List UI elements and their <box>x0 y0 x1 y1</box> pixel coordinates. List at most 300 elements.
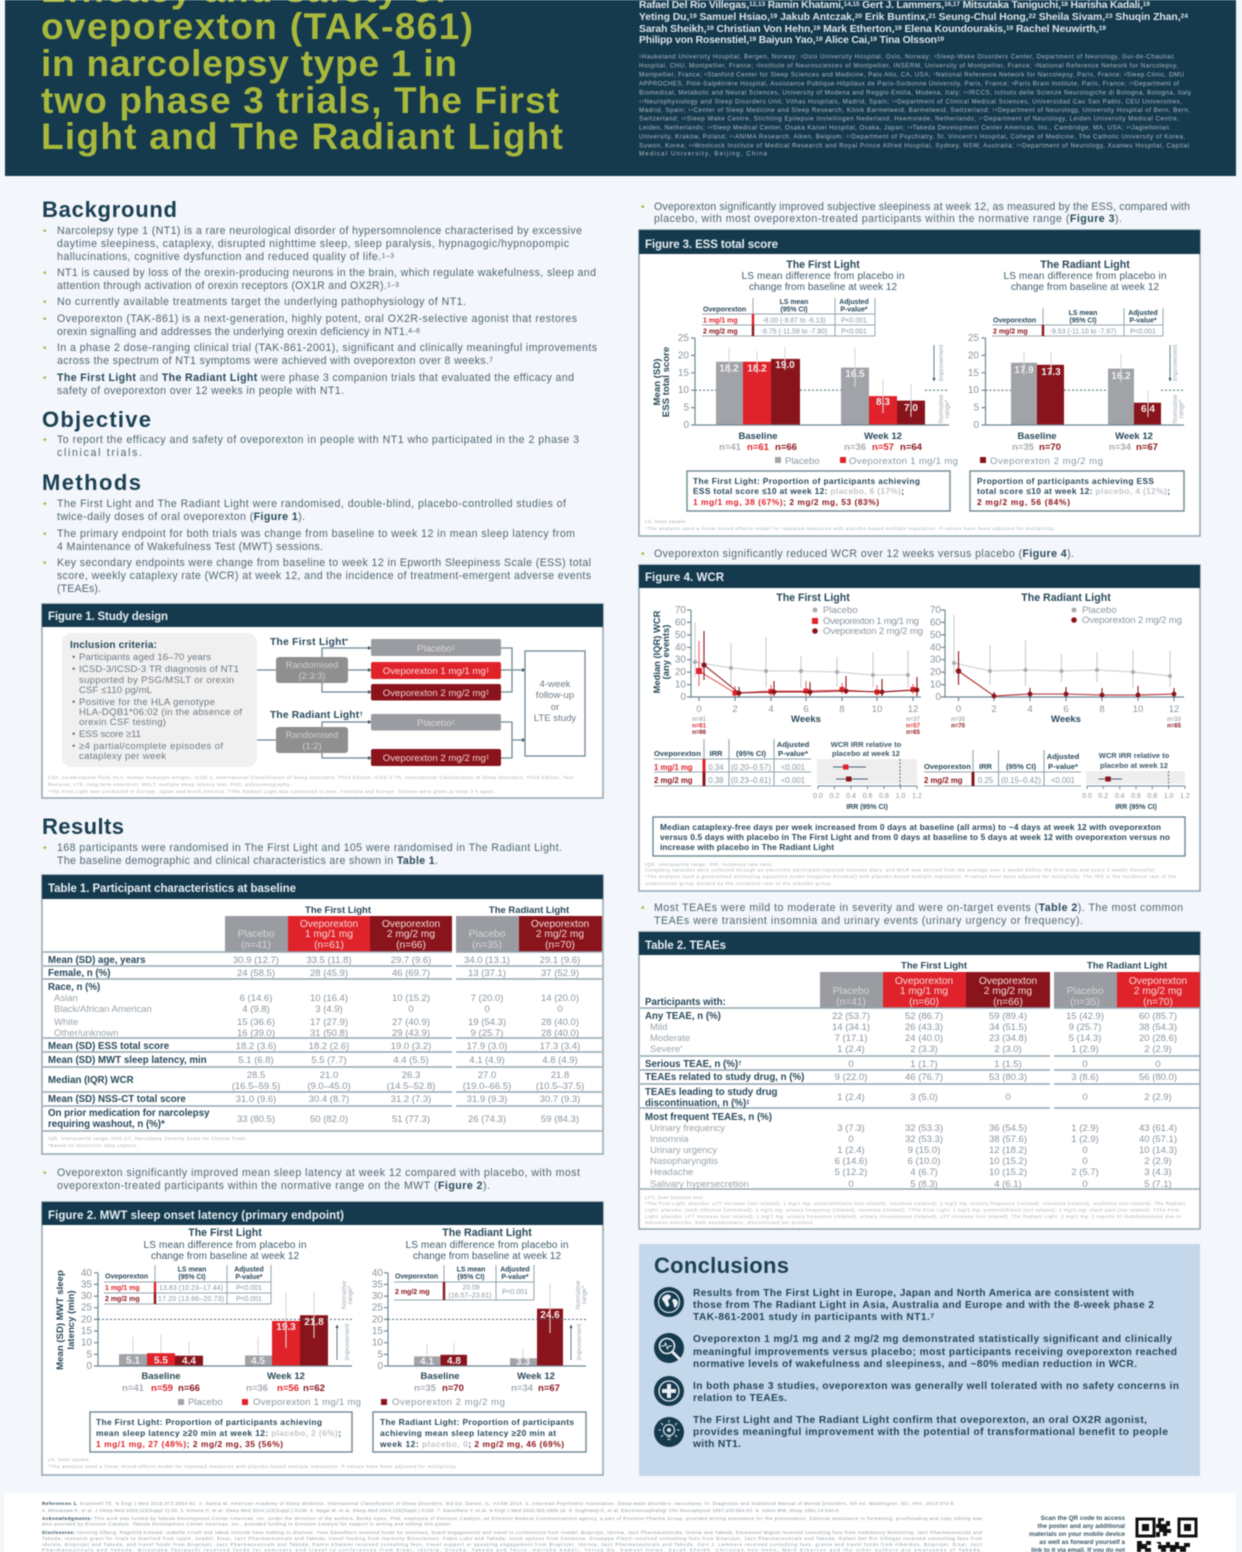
line chart: first light WCR: The First Light <box>776 592 850 604</box>
table 1 values: (16.5–59.5) <box>232 1081 280 1092</box>
bar chart: radiant light ESS: 0 <box>973 420 979 431</box>
table 2 column headers: Placebo <box>1067 986 1104 997</box>
footnote <box>48 775 574 794</box>
inset table: first light ESS: -9.75 (-11.59 to -7.90) <box>761 328 827 336</box>
forest plot: radiant light: placebo at week 12 <box>1100 761 1168 770</box>
line chart: first light WCR: 50 <box>675 630 686 641</box>
table 2 values: 38 (54.3) <box>1139 1022 1177 1033</box>
2 mg series <box>958 651 1174 697</box>
table 2 values: 0 <box>848 1059 854 1070</box>
figure 4 footnote: IQR, interquartile range; IRR, incidence rate ratio. <box>645 862 773 867</box>
table 2 column headers: The Radiant Light <box>1087 960 1168 972</box>
table 2 values: 0 <box>1082 1145 1088 1156</box>
figure 3 subtitles: The Radiant Light <box>1040 259 1130 271</box>
bar chart: first light ESS <box>678 333 951 453</box>
table 1 values: 29 (43.9) <box>392 1028 430 1039</box>
table 2 values: 0 <box>1005 1092 1011 1103</box>
bullet: ESS: placebo, with most oveporexton-treated participants within the normative range (Figure 3). <box>654 213 1122 225</box>
table 1 column headers: (n=70) <box>545 940 575 951</box>
line chart: first light WCR: n=65 <box>906 730 921 736</box>
table 1 row labels: Race, n (%) <box>48 982 100 993</box>
bar chart: radiant light ESS: 20 <box>968 350 979 361</box>
bar chart: first light MWT: Week 12 <box>267 1371 305 1382</box>
table 1 values: 9 (25.7) <box>471 1028 503 1039</box>
table 2 row labels: Insomnia <box>650 1134 689 1145</box>
section: background <box>42 197 597 397</box>
line chart: first light WCR: 30 <box>675 655 686 666</box>
QR code instructions: the poster and any additional <box>1038 1523 1125 1530</box>
bullet: mean sleep latency <box>43 1167 580 1192</box>
inclusion criteria box: Inclusion criteria: <box>70 640 157 651</box>
line chart: first light WCR: 6 <box>803 704 809 715</box>
table 2 values: 1 (2.4) <box>837 1044 865 1055</box>
bar chart: first light MWT: 21.8 <box>304 1317 324 1328</box>
table 2 column headers: The First Light <box>901 960 968 972</box>
table 1 values: 21.8 <box>551 1070 569 1081</box>
table 2 column headers: 2 mg/2 mg <box>984 986 1032 997</box>
table 2 values: 0 <box>1082 1156 1088 1167</box>
references and disclosures: Disclosures: Henning Olberg, Ragnhild Kolstad, Isabelle Arnulf and Jakub Antczak have nothing to disclose. Yves Dauvilliers received funds for seminars, board engagements and travel to conferences from Avadel, Bioprojet, Idorsia, Jazz Pharmaceuticals, Orexia and Takeda; Emmanuel Mignot received consulting fees from Ambulatory Monitoring, Jazz Pharmaceuticals and <box>42 1530 982 1535</box>
table 2 footnote <box>645 1195 1186 1225</box>
table 2 values <box>832 1011 1177 1190</box>
authors: Philipp von Rosenstiel,19 Baiyun Yao,19 Alice Cai,19 Tina Olsson19 <box>639 35 944 46</box>
table 2 values: 20 (28.6) <box>1139 1033 1177 1044</box>
bullet list: background: • <box>43 373 47 384</box>
table 2 values: 4 (6.1) <box>994 1179 1022 1190</box>
figure 2 legend <box>178 1397 505 1408</box>
bar chart: first light MWT: Baseline <box>141 1371 181 1382</box>
table 1 values: 28 (45.9) <box>310 968 348 979</box>
QR code instructions: as well as forward yourself a <box>1039 1539 1125 1546</box>
inset table: radiant light ESS: Adjusted <box>1128 310 1158 317</box>
table 2 values: 9 (15.0) <box>908 1145 940 1156</box>
table 1 values: 0 <box>408 1004 414 1015</box>
bar chart: radiant light ESS: 10 <box>968 385 979 396</box>
bullet list: background: • <box>43 268 47 279</box>
bar chart: first light MWT: 35 <box>81 1279 92 1290</box>
inclusion criteria box: • <box>72 741 75 752</box>
table 1 footnote <box>48 1136 247 1148</box>
table 1 values: 10 (15.2) <box>392 993 430 1004</box>
conclusion text 2: meaningful improvements versus placebo; most participants receiving oveporexton reached <box>693 1347 1177 1358</box>
table 2 values: 5 (8.3) <box>910 1179 938 1190</box>
IRR table: radiant light: IRR <box>979 762 993 771</box>
line chart: radiant light WCR: 0 <box>935 692 941 703</box>
table 1 values: 14 (20.0) <box>541 993 579 1004</box>
inset table: first light ESS: Adjusted <box>839 299 869 306</box>
affiliations: Biomedical, Metabolic and Neural Sciences, University of Modena and Reggio-Emilia, Modena, Italy; 11IRCCS, Istituto delle Scienze Neurologiche di Bologna, Bologna, Italy <box>639 89 1192 96</box>
inclusion criteria box: CSF ≤110 pg/mL <box>79 685 153 696</box>
bullet list: methods: Key secondary endpoints were change from baseline to week 12 in Epworth Sleepiness Scale (ESS) total <box>57 557 591 569</box>
table 2 values: 2 (3.0) <box>994 1044 1022 1055</box>
panel: table 2 TEAEs: Table 2. TEAEs <box>645 940 726 952</box>
figure 2 subtitles: LS mean difference from placebo in <box>406 1240 568 1251</box>
table 1 row labels: requiring washout, n (%)* <box>48 1119 165 1130</box>
bullet list: background: Oveporexton (TAK-861) is a next-generation, highly potent, oral OX2R-selective agonist that restores <box>57 313 577 325</box>
IRR table: first light: (0.23–0.61) <box>731 776 771 785</box>
table 1 values: 15 (36.6) <box>237 1017 275 1028</box>
conclusion text 1: Results from The First Light in Europe, Japan and North America are consistent with <box>693 1288 1134 1299</box>
forest plot: radiant light: 0.2 <box>1098 793 1108 800</box>
figure 3 subtitles: LS mean difference from placebo in <box>1004 271 1166 282</box>
IRR table: radiant light <box>924 750 1081 786</box>
authors: Yeting Du,19 Samuel Hsiao,19 Jakub Antczak,20 Erik Buntinx,21 Seung-Chul Hong,22 Sheila Sivam,23 Shuqin Zhan,24 <box>639 12 1188 23</box>
bar chart: first light ESS: n=57 <box>872 442 894 453</box>
table 1 values: 30.9 (12.7) <box>233 955 279 966</box>
line chart: first light WCR: (any events) <box>660 625 671 679</box>
inset table: radiant light MWT <box>394 1265 534 1300</box>
line chart: first light WCR: 8 <box>839 704 845 715</box>
bar chart: first light ESS: 18.2 <box>719 364 739 374</box>
inclusion criteria box: • <box>72 664 75 675</box>
table 1 values: 18.2 (3.6) <box>236 1041 276 1052</box>
figure 2 subtitles: change from baseline at week 12 <box>151 1251 299 1262</box>
table 2 values: 52 (86.7) <box>905 1011 943 1022</box>
IRR table: radiant light: 0.25 <box>978 776 994 785</box>
table 2 column headers: (n=35) <box>1070 997 1100 1008</box>
bar chart: radiant light ESS: 6.4 <box>1141 404 1155 415</box>
bar chart: radiant light MWT: 30 <box>372 1291 383 1302</box>
table 2 row labels: Mild <box>650 1022 667 1033</box>
forest plot: first light: 0.2 <box>830 793 839 800</box>
inset table: radiant light ESS: -9.53 (-11.10 to -7.97) <box>1050 328 1116 336</box>
table 2 values: 7 (17.1) <box>835 1033 867 1044</box>
table 2 row labels: TEAEs leading to study drug <box>645 1087 777 1098</box>
bullet list: background: daytime sleepiness, cataplexy, disrupted nighttime sleep, sleep paralysis, hypnagogic/hypnopompic <box>57 238 570 250</box>
figure 4 footnote <box>645 862 1176 886</box>
callout: radiant light proportion: week 12: placebo, 0; 2 mg/2 mg, 46 (69%) <box>379 1439 564 1449</box>
table 1 values: 27 (40.9) <box>392 1017 430 1028</box>
callout: radiant light proportion: The Radiant Light: Proportion of participants <box>380 1417 574 1427</box>
line chart: radiant light WCR: The Radiant Light <box>1021 592 1111 604</box>
bullet list: methods: • <box>43 529 47 540</box>
bar chart: radiant light MWT: 4.8 <box>447 1356 461 1367</box>
IRR table: first light <box>654 739 811 786</box>
bullet list: background <box>43 225 597 397</box>
figure 2 subtitles: change from baseline at week 12 <box>413 1251 561 1262</box>
inset table: first light MWT: (95% CI) <box>178 1274 206 1281</box>
arm: oveporexton 2 mg radiant <box>371 749 501 766</box>
IRR table: first light: IRR <box>709 749 723 758</box>
line chart legend: Oveporexton 2 mg/2 mg <box>1082 615 1182 626</box>
forest plot: first light: 0.0 <box>813 793 823 800</box>
figure 3 y axis label: Mean (SD) <box>652 359 663 405</box>
conclusion text 1: TAK-861-2001 study in participants with NT1.7 <box>693 1312 934 1323</box>
inclusion criteria box: ESS score ≥11 <box>79 729 141 740</box>
inclusion criteria box: supported by PSG/MSLT or orexin <box>79 675 234 686</box>
line chart: radiant light WCR: Weeks <box>1051 714 1081 725</box>
table 2 values: 60 (85.7) <box>1139 1011 1177 1022</box>
bar chart: radiant light ESS <box>968 333 1185 453</box>
bar chart: radiant light ESS: range* <box>1178 399 1185 418</box>
figure 3 legend: Oveporexton 1 mg/1 mg <box>849 456 958 467</box>
table 1 values: 3 (4.9) <box>315 1004 343 1015</box>
table 2 values: 3 (8.6) <box>1071 1072 1099 1083</box>
table 1 values: 50 (82.0) <box>310 1114 348 1125</box>
forest plot: radiant light: 0.0 <box>1082 793 1092 800</box>
arm: oveporexton 2 mg <box>371 684 501 700</box>
footnote: Revision; LTE, long-term extension; MSLT, multiple sleep latency test; PSG, polysomnography. <box>48 782 291 787</box>
QR code instructions <box>1029 1515 1126 1552</box>
table 1 values: 4.1 (4.9) <box>469 1055 505 1066</box>
inset table: first light MWT: P-value* <box>235 1274 263 1281</box>
line chart: radiant light WCR: 60 <box>930 617 941 628</box>
forest plot: radiant light: 1.2 <box>1180 793 1190 800</box>
references and disclosures: 4. Mitsukawa K, et al. J Sleep Med 2024;115(Suppl 1):S5. 5. Kimura H, et al. Sleep Med 2024;115(Suppl.):S108. 6. Nagai M, et al. Sleep Med 2024;115(Suppl.):S328. 7. Dauvilliers Y, et al. N Engl J Med 2025;392:1905-16. 8. Doghramji K, et al. Electroencephalogr Clin Neurophysiol 1997;103:554-62. 9. Johns MW. Sleep 1991;14:540-5. <box>42 1508 840 1513</box>
table 1 values: 59 (84.3) <box>541 1114 579 1125</box>
table 1 row labels <box>48 955 210 1130</box>
table 1 values: 46 (69.7) <box>392 968 430 979</box>
inclusion criteria box: • <box>72 652 75 663</box>
bullet: TEAEs: TEAEs were transient insomnia and urinary events (urinary urgency or frequency). <box>654 915 1083 927</box>
bar chart: first light ESS: range* <box>944 399 951 418</box>
table 1 row labels: Median (IQR) WCR <box>48 1075 134 1086</box>
table 2 values: 6 (10.0) <box>908 1156 940 1167</box>
figure 4 footnote: *The analysis used a generalised estimating equations model (negative binomial) with placebo-based multiple imputation. P-values have been adjusted for multiplicity. The IRR is the incidence rate of the <box>645 874 1176 879</box>
IRR table: first light: <0.001 <box>781 763 805 772</box>
arm: oveporexton 1 mg <box>371 662 501 679</box>
line chart: radiant light WCR: 4 <box>1027 704 1033 715</box>
callout: radiant light ESS proportion <box>970 471 1184 511</box>
table 2 footnote: intensive exercise, both asymptomatic, discontinued per protocol. <box>645 1220 814 1225</box>
table 2 footnote: LFT, liver function test. <box>645 1195 704 1200</box>
line chart: radiant light WCR: 6 <box>1063 704 1069 715</box>
table 1 column headers: Oveporexton <box>531 919 589 930</box>
inset table: first light MWT: 1 mg/1 mg <box>105 1285 140 1292</box>
table 1 values: 0 <box>484 1004 490 1015</box>
placebo series <box>954 615 1170 688</box>
table 1 values: 4.4 (5.5) <box>393 1055 429 1066</box>
figure 3 footnote: LS, least square. <box>645 519 687 524</box>
table 2 values: 0 <box>848 1179 854 1190</box>
bar chart: radiant light ESS: n=70 <box>1039 442 1061 453</box>
inset table: first light MWT: P<0.001 <box>236 1285 262 1292</box>
objective text <box>43 434 579 459</box>
inset table: first light MWT: 17.20 (13.66–20.73) <box>158 1296 224 1303</box>
bar chart: first light ESS: 18.2 <box>747 364 767 374</box>
inclusion criteria box: Positive for the HLA genotype <box>79 697 215 708</box>
references and disclosures: Idorsia, Bioprojet and Takeda, and travel funds from Bioprojet, Jazz Pharmaceuticals and Takeda. Ramin Khatami received consulting fees, travel support or speaking engagement from Bioprojet, Idorsia, Jazz Pharmaceuticals and Takeda. Gert J. Lammers received consulting fees, grants and travel funds from Alkermes, Bioprojet, Eisai, Jazz <box>42 1542 983 1547</box>
bullet: ESS: • <box>641 202 645 213</box>
figure 2 y axis label: latency (min) <box>66 1290 77 1350</box>
authors: Sarah Sheikh,19 Christian Von Hehn,19 Mark Etherton,19 Elena Koundourakis,19 Rachel Neuwirth,19 <box>639 24 1106 35</box>
icon: globe <box>654 1287 684 1317</box>
table 2 values: 59 (89.4) <box>989 1011 1027 1022</box>
table 1 column headers: (n=35) <box>472 940 502 951</box>
table 1 values: 26.3 <box>402 1070 420 1081</box>
inset table: first light MWT: Adjusted <box>234 1266 264 1274</box>
bar chart: first light MWT: 5.1 <box>126 1356 140 1366</box>
panel: table 1 participant characteristics: Table 1. Participant characteristics at baseline <box>48 883 296 895</box>
panel: figure 1 study design <box>42 604 603 798</box>
line chart: first light WCR: 70 <box>675 605 686 616</box>
bullet list: background: No currently available treatments target the underlying pathophysiology of NT1. <box>57 296 466 308</box>
table 2 values: 0 <box>848 1134 854 1145</box>
bullet list: background: attention through activation of orexin receptors (OX1R and OX2R).1–3 <box>57 280 399 292</box>
table 2 row labels: Severe* <box>650 1044 683 1055</box>
bar chart: first light MWT: 5 <box>86 1349 92 1360</box>
line chart: radiant light WCR: 8 <box>1099 704 1105 715</box>
table 2 column headers: (n=60) <box>909 997 939 1008</box>
table 2 row labels: Most frequent TEAEs, n (%) <box>645 1112 772 1123</box>
table 2 row labels <box>645 997 804 1190</box>
conclusion text 1: those from The Radiant Light in Asia, Australia and Europe and with the 8-week phase 2 <box>693 1300 1154 1311</box>
IRR table: first light: Adjusted <box>777 740 810 749</box>
bar chart: first light MWT: n=66 <box>178 1383 200 1394</box>
line chart legend: Placebo <box>823 605 858 616</box>
figure 2 subtitles <box>144 1227 568 1262</box>
table 1 row labels: Mean (SD) NSS-CT total score <box>48 1094 186 1105</box>
forest plot: first light: WCR IRR relative to <box>831 740 902 749</box>
table 2 row labels: Serious TEAE, n (%)† <box>645 1059 742 1070</box>
bar chart: first light ESS: n=41 <box>719 442 742 453</box>
table 2 values: 5 (7.1) <box>1144 1179 1172 1190</box>
IRR table: radiant light: Oveporexton <box>924 762 971 771</box>
table 2 values: 0 <box>1082 1092 1088 1103</box>
affiliations <box>639 53 1192 158</box>
table 1 row labels: Mean (SD) age, years <box>48 955 145 966</box>
bar chart: first light MWT: 5.5 <box>154 1356 168 1366</box>
bar chart: radiant light MWT: 15 <box>372 1326 383 1337</box>
bar chart: first light MWT: 4.4 <box>182 1356 196 1367</box>
line chart: radiant light WCR: 12 <box>1169 704 1179 715</box>
callout: radiant light ESS proportion: 2 mg/2 mg, 56 (84%) <box>977 497 1070 507</box>
panel: conclusions <box>639 1244 1200 1476</box>
table 1 values: (14.5–52.8) <box>387 1081 435 1092</box>
inset table: first light ESS: Oveporexton <box>703 306 746 314</box>
table 1 rules <box>43 952 602 1131</box>
table 1 column headers: 2 mg/2 mg <box>387 929 435 940</box>
table 2 values: 9 (25.7) <box>1069 1022 1101 1033</box>
table 2 values: 2 (2.9) <box>1144 1092 1172 1103</box>
trial label: radiant light: The Radiant Light† <box>270 710 363 721</box>
bar chart: radiant light ESS: Week 12 <box>1115 431 1153 442</box>
inset table: radiant light ESS: 2 mg/2 mg <box>993 328 1028 336</box>
line chart: first light WCR: 0 <box>680 692 686 703</box>
affiliations: Suwon, Korea; 23Woolcock Institute of Medical Research and Royal Prince Alfred Hospital, Sydney, NSW, Australia; 24Department of Neurology, Xuanwu Hospital, Capital <box>639 142 1189 150</box>
inset table: first light ESS: LS mean <box>780 299 808 306</box>
bullet list: background: • <box>43 314 47 325</box>
inset table: radiant light MWT: Adjusted <box>500 1266 530 1274</box>
placebo series <box>695 622 908 688</box>
callout: first light proportion <box>90 1412 352 1452</box>
arm: oveporexton 2 mg radiant: Oveporexton 2 mg/2 mg‡ <box>383 753 490 764</box>
forest plot: first light: IRR (95% CI) <box>846 804 888 811</box>
line chart: first light WCR: 60 <box>675 617 686 628</box>
inclusion criteria box: • <box>72 729 75 740</box>
table 1 column headers: (n=66) <box>396 940 426 951</box>
bar chart: first light ESS: 10 <box>678 385 689 396</box>
bar chart: radiant light MWT: 20 <box>372 1314 383 1325</box>
section: objective <box>42 407 579 459</box>
figure 4 footnote: Cataplexy episodes were collected through an electronic participant-reported outcome diary, and WCR was derived from the average over 2 weeks before the first dose and every 2 weeks thereafter. <box>645 868 1156 872</box>
follow-up box: or <box>551 702 560 713</box>
callout: cataplexy-free days <box>653 817 1185 856</box>
table 2 values: 40 (57.1) <box>1139 1134 1177 1145</box>
results text: • <box>43 843 47 854</box>
bar chart: radiant light MWT: 24.6 <box>540 1310 560 1321</box>
bullet list: methods: score, weekly cataplexy rate (WCR) at week 12, and the incidence of treatment-emergent adverse events <box>57 570 591 582</box>
footnote: *The First Light was conducted in Europe, Japan and North America. †The Radiant Light was conducted in Asia, Australia and Europe. ‡Doses were given at least 3 h apart. <box>48 789 495 794</box>
table 1 values: 28.5 <box>247 1070 265 1081</box>
line chart: first light WCR <box>651 592 923 736</box>
bar chart: first light MWT: 15 <box>81 1326 92 1337</box>
inclusion criteria box: ICSD-3/ICSD-3 TR diagnosis of NT1 <box>79 664 239 675</box>
forest plot: first light <box>813 740 922 811</box>
icon: magnifier <box>654 1333 684 1363</box>
callout: cataplexy-free days: increase with placebo in The Radiant Light <box>660 842 834 852</box>
inset table: first light ESS: 1 mg/1 mg <box>703 318 738 324</box>
line chart: radiant light WCR: 2 <box>991 704 997 715</box>
table 2 column headers: (n=41) <box>836 997 866 1008</box>
1 mg series <box>699 641 913 697</box>
table 1 column headers: The Radiant Light <box>489 905 570 916</box>
table 2 row labels: discontinuation, n (%)‡ <box>645 1098 750 1109</box>
table 1 values: 30.7 (9.3) <box>540 1094 580 1105</box>
panel: figure 4 WCR: Figure 4. WCR <box>645 572 725 584</box>
bullet list: methods: • <box>43 499 47 510</box>
bar chart: first light MWT: n=62 <box>303 1383 325 1394</box>
table 1 column headers: Oveporexton <box>300 919 358 930</box>
inset table: radiant light MWT: 2 mg/2 mg <box>395 1289 430 1296</box>
IRR table: radiant light: Adjusted <box>1047 752 1080 761</box>
table 2 values: 53 (80.3) <box>989 1072 1027 1083</box>
bar chart: radiant light ESS: Improvement <box>1172 344 1179 381</box>
inset table: radiant light ESS <box>992 308 1163 336</box>
inset table: radiant light MWT: (95% CI) <box>457 1274 485 1281</box>
bar chart: first light MWT: n=41 <box>122 1383 145 1394</box>
objective text: To report the efficacy and safety of oveporexton in people with NT1 who participated in the 2 phase 3 <box>57 434 579 446</box>
QR code <box>1137 1518 1196 1552</box>
follow-up box: LTE study <box>534 713 576 724</box>
affiliations: 1Haukeland University Hospital, Bergen, Norway; 2Oslo University Hospital, Oslo, Norway; 3Sleep-Wake Disorders Center, Department of Neurology, Gui-de-Chauliac <box>639 53 1174 60</box>
bar chart: radiant light ESS: n=67 <box>1136 442 1158 453</box>
table 2 values: 23 (34.8) <box>989 1033 1027 1044</box>
table 2 values: 56 (80.0) <box>1139 1072 1177 1083</box>
table 1 row labels: White <box>54 1017 78 1028</box>
forest plot: radiant light: 0.4 <box>1115 793 1125 800</box>
forest plot: radiant light: 0.6 <box>1131 793 1141 800</box>
table 2 row labels: TEAEs related to study drug, n (%) <box>645 1072 804 1083</box>
bar chart: radiant light ESS: Baseline <box>1017 431 1057 442</box>
bar chart: radiant light MWT: 40 <box>372 1268 383 1279</box>
bullet list: background: The First Light and The Radiant Light were phase 3 companion trials that evaluated the efficacy and <box>57 372 574 384</box>
table 2 values: 0 <box>1082 1179 1088 1190</box>
line chart legend: Oveporexton 2 mg/2 mg <box>823 626 923 637</box>
table 1 values: 4 (9.8) <box>242 1004 270 1015</box>
table 2 footnote: *The First Light: placebo: LFT increase (not related); 1 mg/1 mg: ureterolithiasis (not related), insomnia (related); 2 mg/2 mg: urinary frequency (related), insomnia (related), erythema (not related). The Radiant <box>645 1201 1186 1206</box>
bar chart: first light ESS: Week 12 <box>864 431 902 442</box>
line chart: radiant light WCR: n=65 <box>1167 724 1182 730</box>
references and disclosures: Takeda; research grant for trials to Stanford from Apple, Avadel, Eisai, Jazz Pharmaceuticals and Takeda; travel funding from Harmony Biosciences. Fabio Lubo and Takeda; stock options from Centessa. Giuseppe Plazzi received consulting fees from Bioprojet, Jazz Pharmaceuticals and Takeda. Rafael Del Rio Villegas received consulting fees from <box>42 1536 982 1541</box>
table 1 row labels: Asian <box>54 993 78 1004</box>
conclusion text 4: The First Light and The Radiant Light confirm that oveporexton, an oral OX2R agonist, <box>693 1415 1147 1426</box>
bar chart: radiant light ESS: 16.2 <box>1111 371 1131 382</box>
bar chart: radiant light MWT: n=67 <box>538 1383 560 1394</box>
table 2 column headers: Oveporexton <box>979 976 1037 987</box>
header banner <box>5 0 1236 176</box>
table 2 row labels: Moderate <box>650 1033 690 1044</box>
arm: placebo 1: Placebo‡ <box>417 644 456 654</box>
table 1 values: (9.0–45.0) <box>307 1081 351 1092</box>
bullet: mean sleep latency: • <box>43 1168 47 1179</box>
heading: background: Background <box>42 197 177 222</box>
table 1 values: 5.5 (7.7) <box>311 1055 347 1066</box>
bar chart: radiant light ESS: Normative <box>1172 394 1179 423</box>
bullet: TEAEs: Most TEAEs were mild to moderate in severity and were on-target events (Table 2). The most common <box>654 902 1183 914</box>
affiliations: Leiden, Netherlands; 18Sleep Medical Center, Osaka Kaisei Hospital, Osaka, Japan; 19Takeda Development Center Americas, Inc., Cambridge, MA, USA; 20Jagiellonian <box>639 124 1170 132</box>
bar chart: first light MWT: 30 <box>81 1291 92 1302</box>
